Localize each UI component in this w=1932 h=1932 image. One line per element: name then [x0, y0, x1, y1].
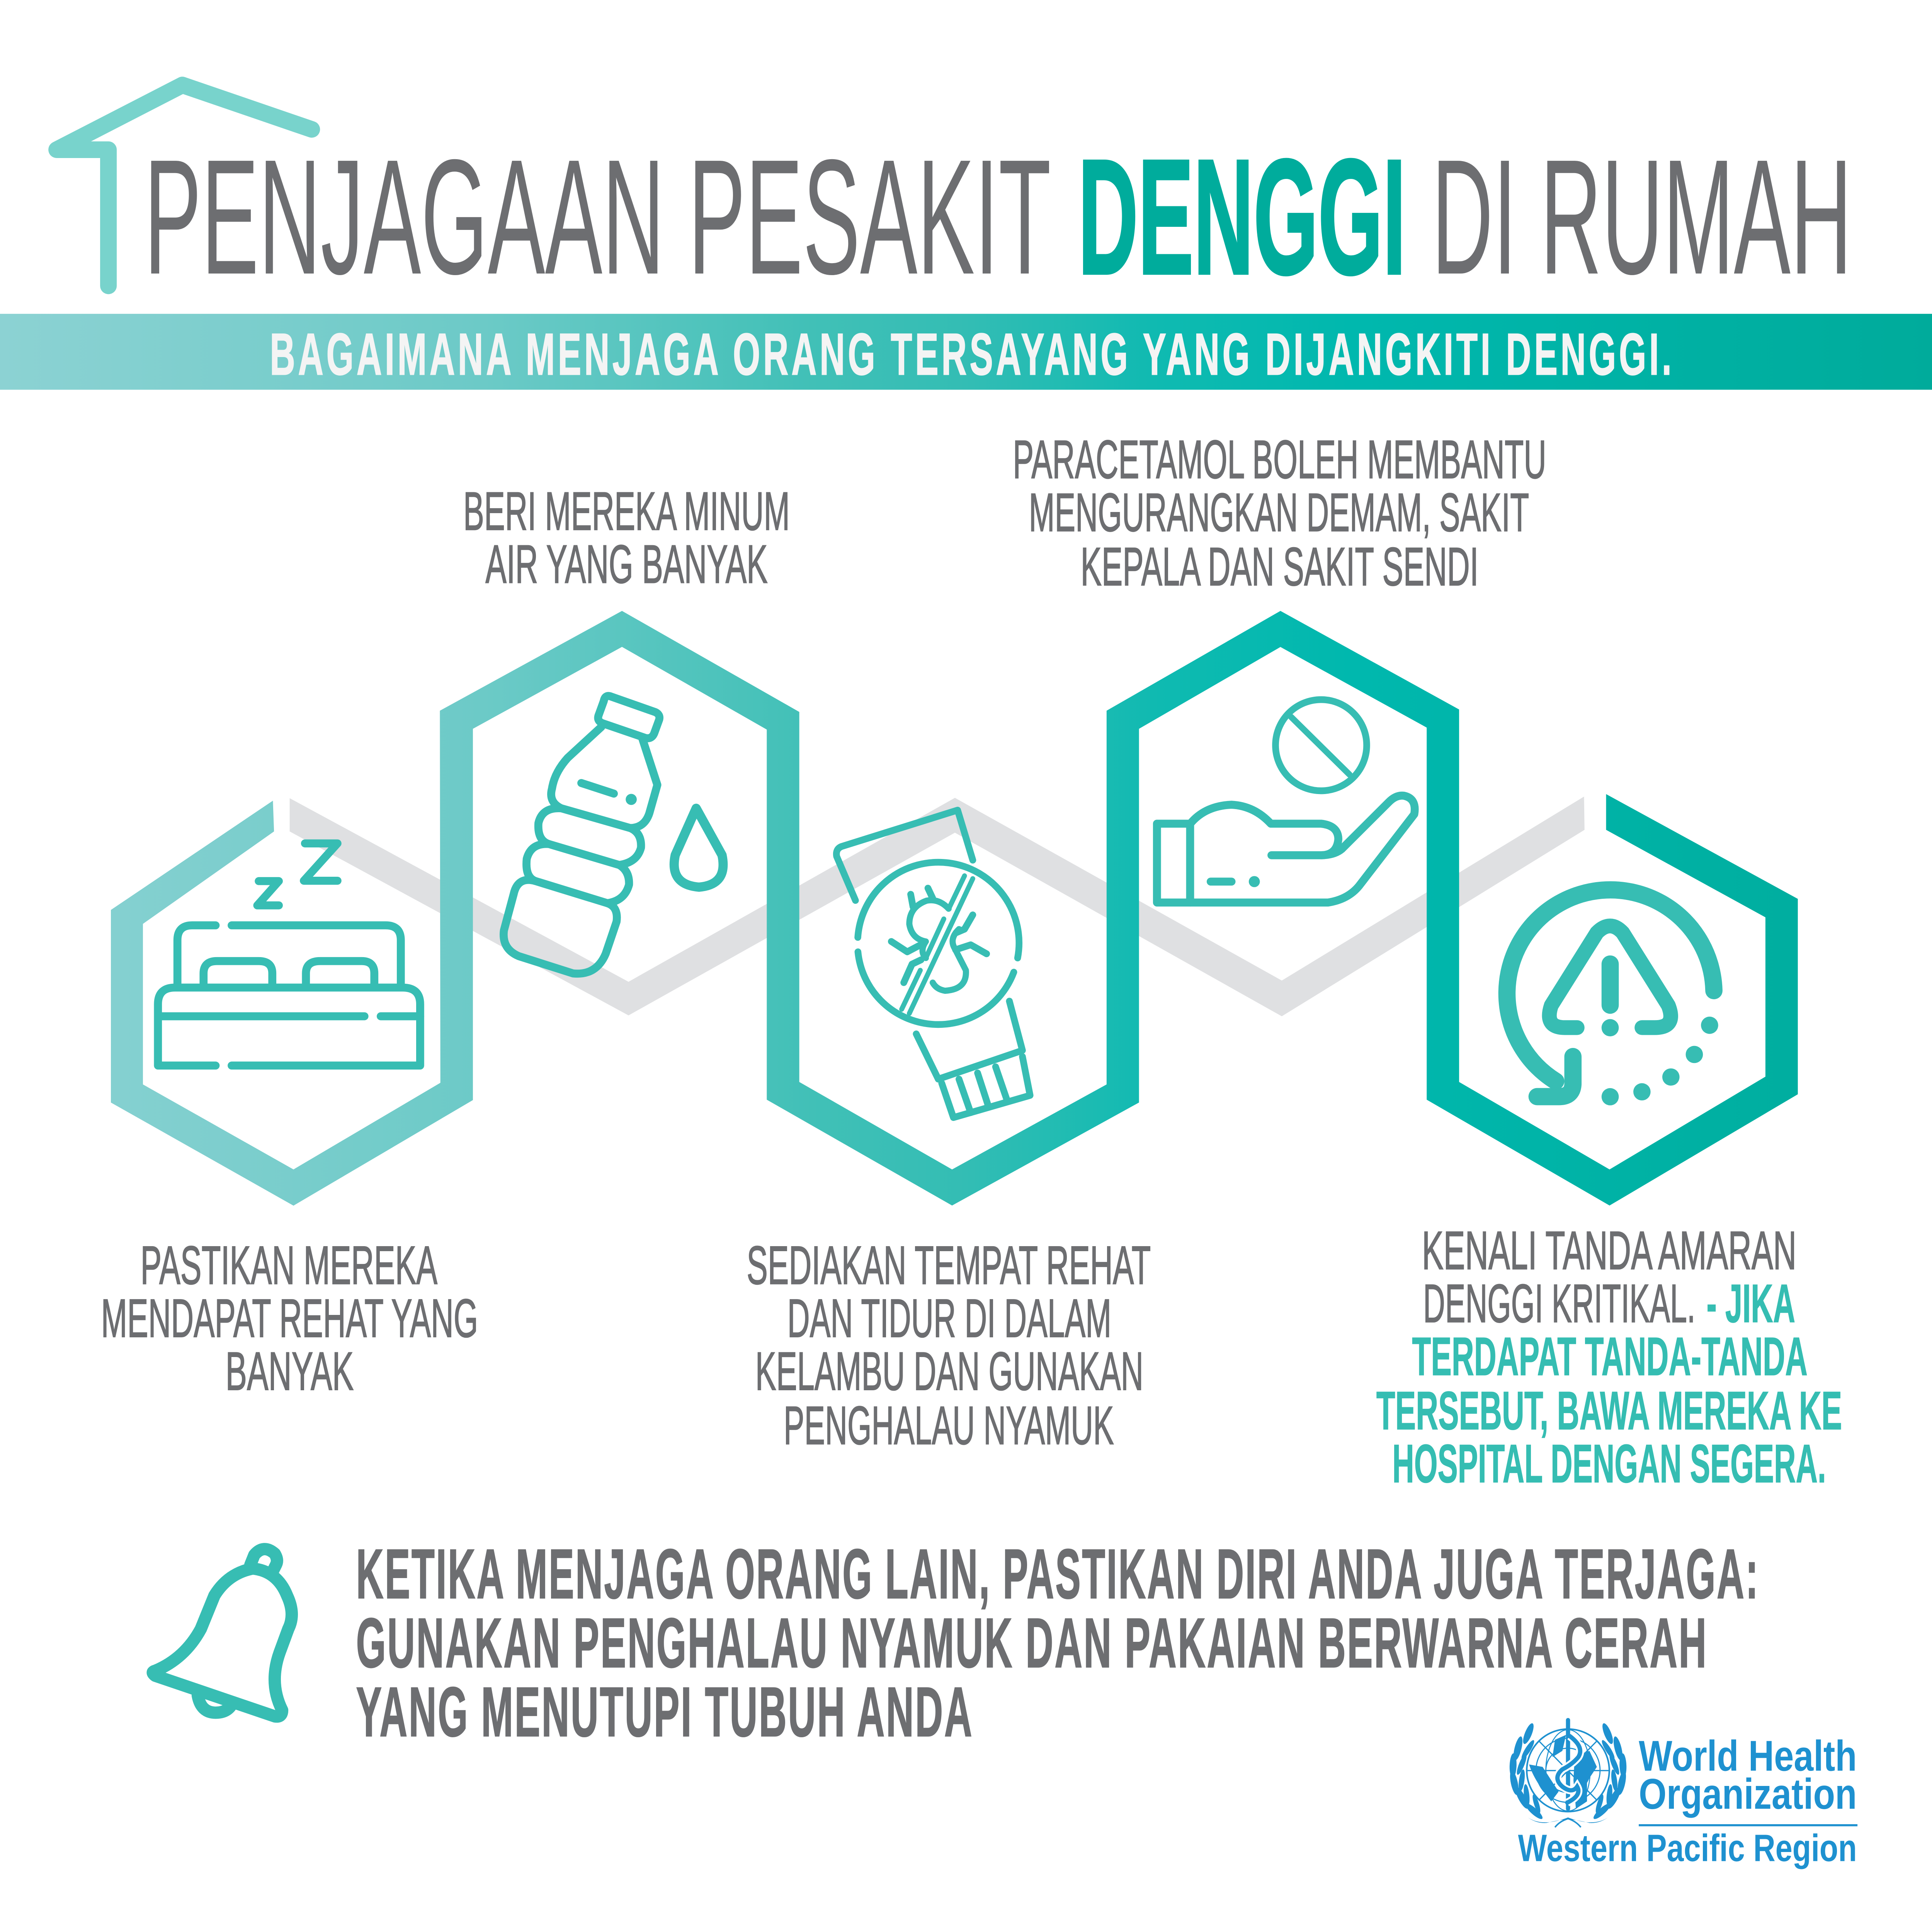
- text: caregiver protection message: [356, 1535, 1760, 1752]
- icon: water bottle and drop: [503, 696, 723, 974]
- text: rest: BANYAK: [226, 1342, 354, 1402]
- title: PENJAGAAN PESAKIT: [144, 127, 1051, 309]
- hexagon ribbon: [111, 611, 1798, 1206]
- text: bed net and repellent: SEDIAKAN TEMPAT REHAT: [747, 1236, 1151, 1296]
- text: paracetamol: MENGURANGKAN DEMAM, SAKIT: [1029, 483, 1529, 543]
- text: warning signs: DENGGI KRITIKAL.: [1423, 1274, 1696, 1334]
- text: rest: PASTIKAN MEREKA: [141, 1236, 438, 1296]
- icon: bell: [153, 1549, 292, 1716]
- text: bed net and repellent: [747, 1236, 1151, 1456]
- logo: World Health Organization Western Pacific Region: Organization: [1639, 1770, 1857, 1819]
- text: drink water: AIR YANG BANYAK: [485, 535, 768, 595]
- text: bed net and repellent: PENGHALAU NYAMUK: [784, 1396, 1114, 1456]
- text: drink water: [463, 482, 790, 595]
- text: drink water: BERI MEREKA MINUM: [463, 482, 790, 542]
- icon: bed with sleep symbols: [158, 844, 420, 1066]
- text: paracetamol: PARACETAMOL BOLEH MEMBANTU: [1013, 430, 1546, 490]
- icon: warning triangle in dotted circle: [1507, 890, 1718, 1105]
- text: caregiver protection message: YANG MENUTUPI TUBUH ANDA: [356, 1673, 973, 1752]
- grey zigzag background line: [290, 797, 1585, 1016]
- text: rest: MENDAPAT REHAT YANG: [101, 1289, 478, 1349]
- logo: World Health Organization Western Pacific Region: Western Pacific Region: [1518, 1827, 1857, 1870]
- text: paracetamol: [1013, 430, 1546, 598]
- text: warning signs: - JIKA: [1706, 1274, 1795, 1334]
- text: bed net and repellent: DAN TIDUR DI DALAM: [787, 1289, 1111, 1349]
- icon: hand holding pill: [1157, 700, 1415, 903]
- icon: house outline: [57, 85, 312, 286]
- icon: repellent tube with crossed mosquito: [837, 810, 1030, 1117]
- title: DENGGI: [1078, 127, 1406, 309]
- text: warning signs: [1376, 1221, 1842, 1495]
- logo: World Health Organization Western Pacific Region: [1509, 1720, 1857, 1870]
- text: rest: [101, 1236, 478, 1402]
- text: bed net and repellent: KELAMBU DAN GUNAKAN: [755, 1342, 1143, 1402]
- logo: World Health Organization Western Pacific Region: World Health: [1639, 1732, 1857, 1781]
- emblem: WHO globe, staff and laurels: [1509, 1720, 1628, 1827]
- text: paracetamol: KEPALA DAN SAKIT SENDI: [1081, 537, 1479, 598]
